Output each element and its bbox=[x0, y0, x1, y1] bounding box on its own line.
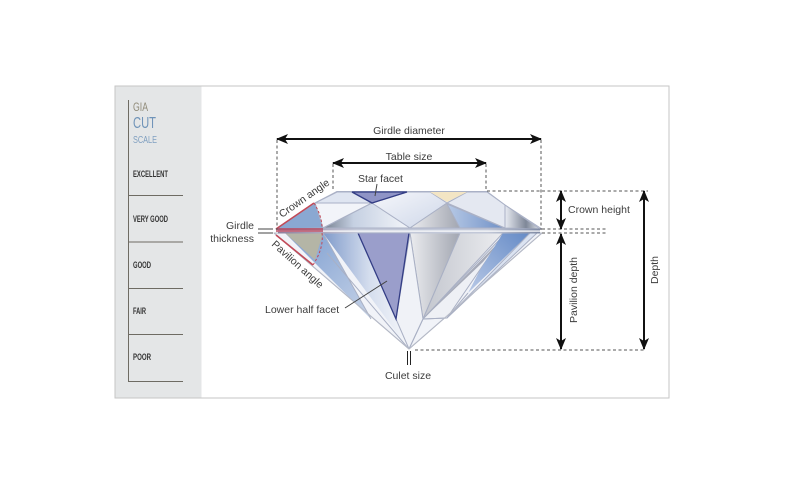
arrow: table size bbox=[333, 162, 486, 164]
crown bbox=[276, 192, 542, 229]
arrow: girdle diameter bbox=[277, 138, 541, 140]
label: table size: Table size bbox=[386, 151, 432, 163]
panel: GIA cut scale sidebar bbox=[116, 86, 202, 398]
pavilion angle marker bbox=[276, 233, 322, 265]
heading: SCALE: SCALE bbox=[133, 135, 157, 146]
label: excellent: EXCELLENT bbox=[133, 169, 168, 179]
label: crown angle: Crown angle bbox=[277, 177, 332, 220]
label: lower half facet: Lower half facet bbox=[265, 304, 339, 316]
label: girdle thickness: Girdle bbox=[226, 220, 254, 232]
girdle thickness marker bbox=[276, 228, 323, 232]
heading: CUT: CUT bbox=[133, 115, 156, 132]
label: girdle diameter: Girdle diameter bbox=[373, 125, 445, 137]
girdle thickness tick bbox=[258, 229, 273, 233]
label: pavilion angle: Pavilion angle bbox=[269, 238, 326, 291]
leader: lower half facet bbox=[345, 281, 387, 308]
lower half facet bbox=[358, 233, 409, 319]
label: very good: VERY GOOD bbox=[133, 214, 168, 224]
label: culet size: Culet size bbox=[385, 370, 431, 382]
label: poor: POOR bbox=[133, 352, 151, 362]
arrow: crown height bbox=[560, 191, 562, 229]
label: depth: Depth bbox=[649, 256, 661, 284]
star facet bbox=[352, 192, 407, 203]
label: girdle thickness: thickness bbox=[210, 233, 254, 245]
dotted guide lines bbox=[277, 140, 648, 350]
arrow: depth bbox=[643, 191, 645, 349]
pavilion bbox=[274, 233, 542, 349]
panel: frame bbox=[115, 86, 669, 398]
crown angle marker bbox=[276, 203, 322, 229]
label: crown height: Crown height bbox=[568, 204, 630, 216]
label: pavilion depth: Pavilion depth bbox=[568, 257, 580, 323]
heading: GIA: GIA bbox=[133, 100, 148, 114]
arrow: pavilion depth bbox=[560, 234, 562, 349]
leader: star facet bbox=[375, 184, 377, 196]
diamond illustration bbox=[274, 192, 542, 349]
label: star facet: Star facet bbox=[358, 173, 403, 185]
culet tick bbox=[408, 351, 410, 365]
label: fair: FAIR bbox=[133, 306, 146, 316]
label: good: GOOD bbox=[133, 260, 151, 270]
girdle band bbox=[278, 228, 540, 234]
